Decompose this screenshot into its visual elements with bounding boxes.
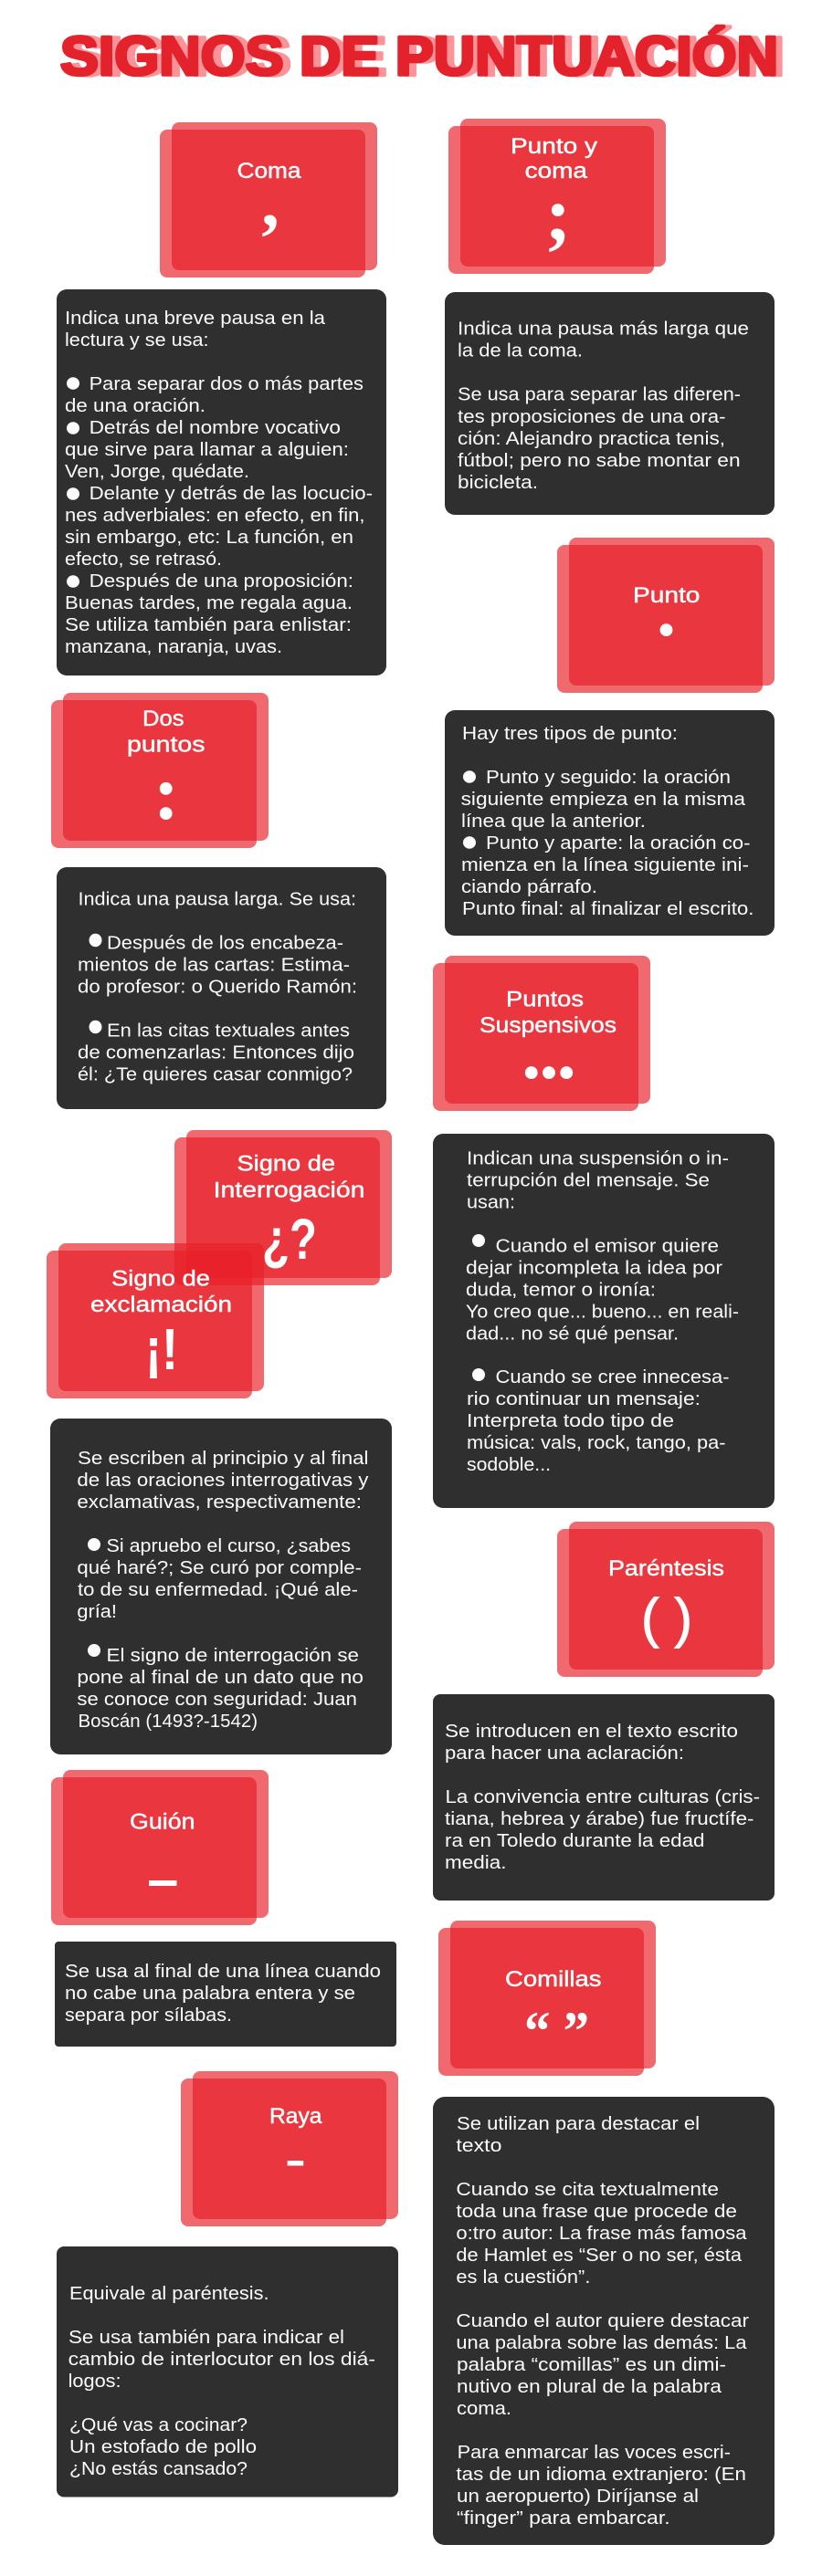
text block: tes proposiciones de una ora- [458, 407, 725, 427]
panel: comillas description [433, 2097, 775, 2545]
text block: Si apruebo el curso, ¿sabes [106, 1536, 351, 1556]
text block: él: ¿Te quieres casar conmigo? [78, 1064, 353, 1084]
text block: una palabra sobre las demás: La [456, 2333, 747, 2353]
panel: coma description [57, 289, 386, 675]
heading: Punto: Punto [633, 583, 700, 608]
text block: efecto, se retrasó. [65, 550, 222, 570]
text block: siguiente empieza en la misma [461, 790, 746, 810]
text block: de comenzarlas: Entonces dijo [78, 1042, 354, 1063]
card: Guión [51, 1770, 269, 1925]
text block: dejar incompleta la idea por [466, 1258, 722, 1278]
icon: short dash: - [285, 2136, 306, 2183]
heading: Signo de exclamación: exclamación [90, 1293, 232, 1317]
card: Puntos Suspensivos [433, 956, 650, 1111]
icon: exclamation marks: ¡! [145, 1316, 178, 1382]
card: Coma [160, 122, 377, 277]
text block: texto [456, 2136, 501, 2156]
text block: Indican una suspensión o in- [467, 1148, 729, 1168]
text block: Se usa también para indicar el [68, 2328, 344, 2348]
text block: El signo de interrogación se [106, 1646, 359, 1666]
text block: palabra “comillas” es un dimi- [457, 2355, 726, 2375]
text block: de las oraciones interrogativas y [77, 1471, 368, 1491]
text block: toda una frase que procede de [456, 2202, 737, 2222]
text block: Se utilizan para destacar el [457, 2114, 700, 2134]
text block: sin embargo, etc: La función, en [65, 528, 353, 548]
text block: no cabe una palabra entera y se [65, 1984, 355, 2004]
text block: separa por sílabas. [65, 2005, 232, 2026]
text block: Indica una breve pausa en la [65, 309, 326, 329]
panel: signos description [50, 1419, 392, 1754]
text block: Delante y detrás de las locucio- [90, 484, 373, 504]
text block: En las citas textuales antes [107, 1021, 350, 1041]
panel: puntos suspensivos description [433, 1134, 775, 1508]
text block: ción: Alejandro practica tenis, [458, 429, 725, 449]
text block: logos: [68, 2372, 121, 2392]
text block: bicicleta. [458, 473, 538, 493]
text block: Cuando se cita textualmente [456, 2180, 719, 2200]
panel: raya description [57, 2246, 398, 2497]
text block: Ven, Jorge, quédate. [65, 462, 249, 482]
text block: nes adverbiales: en efecto, en fin, [65, 506, 365, 526]
text block: ¿No estás cansado? [69, 2459, 248, 2479]
text block: Punto y seguido: la oración [486, 768, 731, 788]
text block: terrupción del mensaje. Se [467, 1170, 710, 1190]
text block: do profesor: o Querido Ramón: [78, 977, 357, 997]
heading: Dos puntos [127, 707, 205, 758]
card: Dos puntos [51, 693, 269, 848]
bullets [90, 934, 102, 1033]
text block: Se usa para separar las diferen- [458, 385, 741, 405]
text block: la de la coma. [458, 341, 583, 361]
heading: Signo de Interrogación: Interrogación [214, 1178, 365, 1203]
panel: punto description [445, 710, 775, 936]
heading: Puntos Suspensivos: Suspensivos [480, 1013, 616, 1038]
text block: Detrás del nombre vocativo [90, 418, 341, 438]
heading: Coma: Coma [237, 159, 301, 183]
text block: Se utiliza también para enlistar: [65, 615, 352, 635]
panel: paréntesis description [433, 1694, 775, 1901]
text block: Cuando el emisor quiere [495, 1236, 719, 1256]
bullets [463, 770, 476, 849]
text block: Interpreta todo tipo de [467, 1411, 674, 1431]
text block: ra en Toledo durante la edad [445, 1831, 705, 1851]
icon: colon: : [153, 750, 179, 836]
heading: Signo de exclamación [90, 1267, 232, 1317]
text block [458, 319, 749, 493]
card: Signo de Interrogación [174, 1130, 392, 1285]
text block: Cuando se cree innecesa- [495, 1367, 729, 1387]
heading: Guión: Guión [130, 1809, 195, 1835]
heading: Raya: Raya [269, 2104, 322, 2129]
text block: Después de los encabeza- [107, 933, 343, 953]
text block: La convivencia entre culturas (cris- [446, 1787, 760, 1807]
text block: gría! [77, 1602, 117, 1622]
card: Raya [181, 2071, 398, 2226]
title: SIGNOS DE PUNTUACIÓN [68, 26, 785, 88]
panel: punto y coma description [445, 292, 775, 515]
text block: línea que la anterior. [461, 812, 646, 832]
heading: Signo de exclamación: Signo de [111, 1267, 210, 1291]
text block [65, 1962, 381, 2026]
heading: Paréntesis: Paréntesis [608, 1556, 724, 1581]
text block: usan: [467, 1192, 515, 1212]
title: SIGNOS DE PUNTUACIÓN [60, 26, 778, 87]
icon: parentheses: ( ) [641, 1587, 692, 1649]
panel: guión description [55, 1942, 396, 2047]
text block: nutivo en plural de la palabra [457, 2377, 722, 2397]
text block: tiana, hebrea y árabe) fue fructífe- [445, 1809, 754, 1829]
text block [68, 2284, 375, 2479]
text block: o:tro autor: La frase más famosa [456, 2224, 747, 2244]
text block: Buenas tardes, me regala agua. [65, 593, 353, 613]
icon: ellipsis: ... [522, 1010, 574, 1095]
heading: Puntos Suspensivos: Puntos [506, 988, 584, 1011]
text block: lectura y se usa: [65, 330, 208, 351]
text block: to de su enfermedad. ¡Qué ale- [78, 1580, 358, 1600]
bullets [472, 1234, 485, 1381]
text block: un aeropuerto) Diríjanse al [457, 2487, 699, 2507]
bullets [88, 1538, 100, 1657]
text block: Yo creo que... bueno... en reali- [466, 1302, 739, 1322]
text block: Punto final: al finalizar el escrito. [462, 899, 754, 919]
heading: Comillas: Comillas [505, 1967, 601, 1992]
text block: dad... no sé qué pensar. [466, 1324, 679, 1344]
text block: que sirve para llamar a alguien: [65, 440, 349, 460]
text block: mienza en la línea siguiente ini- [461, 855, 749, 875]
text block: de una oración. [65, 396, 206, 416]
text block: coma. [457, 2399, 511, 2419]
text block: tas de un idioma extranjero: (En [456, 2465, 746, 2485]
icon: semicolon: ; [545, 172, 571, 257]
text block: ¿Qué vas a cocinar? [69, 2415, 248, 2435]
card: Comillas [438, 1921, 656, 2076]
text block [456, 2114, 749, 2529]
text block: Boscán (1493?-1542) [79, 1712, 258, 1732]
heading: Dos puntos: Dos [142, 707, 184, 731]
text block: música: vals, rock, tango, pa- [467, 1433, 725, 1453]
text block: para hacer una aclaración: [445, 1744, 684, 1764]
text block: se conoce con seguridad: Juan [77, 1690, 357, 1710]
heading: Signo de Interrogación [214, 1152, 365, 1203]
text block: media. [445, 1853, 506, 1873]
heading: Puntos Suspensivos [480, 988, 616, 1038]
heading: Dos puntos: puntos [127, 732, 205, 758]
text block [461, 724, 754, 919]
text block: rio continuar un mensaje: [467, 1389, 701, 1409]
text block: Se usa al final de una línea cuando [65, 1962, 381, 1982]
text block: sodoble... [467, 1455, 551, 1475]
text block: exclamativas, respectivamente: [77, 1492, 362, 1513]
text block: fútbol; pero no sabe montar en [458, 451, 741, 471]
text block: duda, temor o ironía: [466, 1280, 656, 1300]
text block: Indica una pausa larga. Se usa: [79, 889, 356, 909]
text block: ciando párrafo. [461, 877, 597, 897]
text block: Se escriben al principio y al final [78, 1449, 369, 1469]
text block: Se introducen en el texto escrito [445, 1722, 738, 1742]
text block: Hay tres tipos de punto: [462, 724, 678, 744]
text block: Un estofado de pollo [69, 2437, 257, 2457]
text block: Indica una pausa más larga que [458, 319, 749, 340]
text block: pone al final de un dato que no [77, 1668, 364, 1688]
text block [77, 1449, 369, 1732]
bullets [67, 377, 79, 588]
text block: Para separar dos o más partes [90, 374, 364, 394]
text block: de Hamlet es “Ser o no ser, ésta [456, 2246, 743, 2266]
text block: es la cuestión”. [456, 2267, 590, 2288]
heading: Punto y coma: coma [525, 159, 588, 183]
icon: period: . [657, 567, 676, 653]
text block: Punto y aparte: la oración co- [486, 833, 751, 853]
text block: Equivale al paréntesis. [69, 2284, 269, 2304]
card: Paréntesis [557, 1522, 775, 1677]
card: Signo de exclamación [47, 1243, 264, 1398]
text block: cambio de interlocutor en los diá- [68, 2350, 375, 2370]
icon: comma: , [261, 162, 279, 241]
text block: manzana, naranja, uvas. [65, 637, 282, 657]
icon: question marks: ¿? [262, 1208, 317, 1272]
text block [65, 309, 373, 657]
text block: Para enmarcar las voces escri- [458, 2443, 731, 2463]
card: Punto y coma [448, 119, 666, 274]
icon: long dash: — [149, 1848, 177, 1910]
icon: quotation marks: “ ” [524, 2001, 589, 2061]
heading: Signo de Interrogación: Signo de [237, 1152, 335, 1176]
text block: Después de una proposición: [90, 571, 353, 592]
text block [78, 889, 357, 1084]
heading: Punto y coma [511, 134, 597, 183]
text block [466, 1148, 739, 1475]
text block: Cuando el autor quiere destacar [456, 2311, 749, 2331]
panel: dos puntos description [57, 867, 386, 1109]
text block: mientos de las cartas: Estima- [78, 955, 350, 975]
heading: Punto y coma: Punto y [511, 134, 597, 159]
card: Punto [557, 538, 775, 693]
text block: qué haré?; Se curó por comple- [77, 1558, 362, 1578]
text block [445, 1722, 760, 1873]
text block: “finger” para embarcar. [457, 2508, 670, 2529]
